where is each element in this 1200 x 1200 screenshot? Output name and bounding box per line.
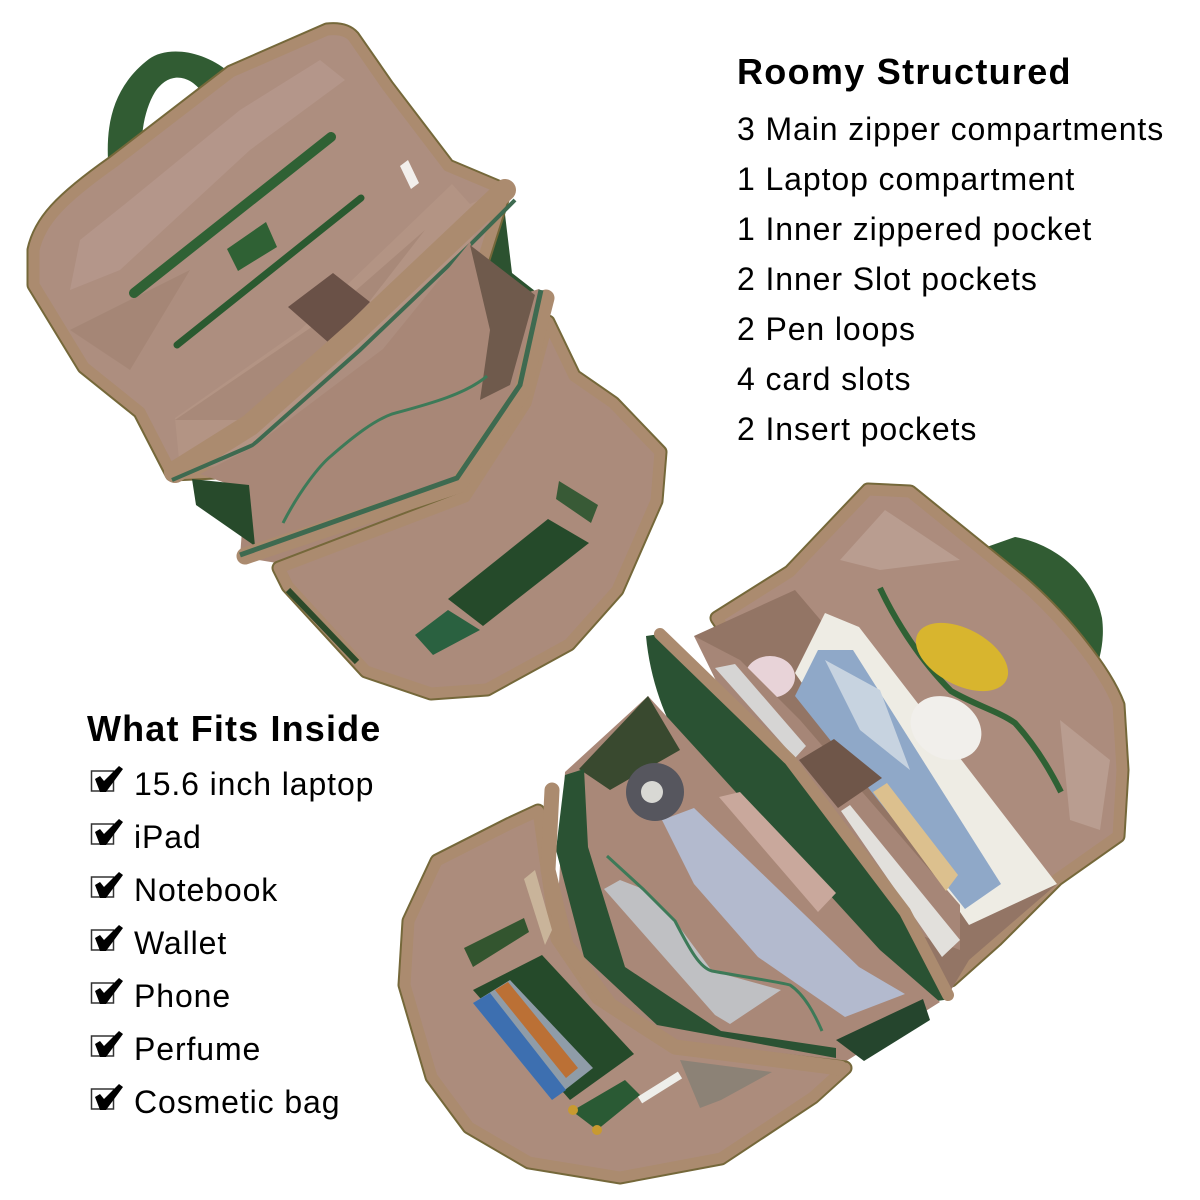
text block: compartments list: 2 Insert pockets [737,411,977,447]
green leather side [192,479,255,546]
text block: compartments list [737,111,1164,447]
back panel outline [717,490,1122,980]
ipad [604,880,781,1024]
green flap [646,634,951,1001]
striped cloth [662,808,905,1017]
care label [400,160,419,189]
zipper pocket [134,137,331,293]
checklist: what fits inside: Perfume [134,1031,261,1067]
flap band [660,634,948,995]
satin highlight [840,510,1110,830]
lower body base [556,696,940,1065]
lower green edge [288,590,357,662]
inner green flap band [556,769,836,1058]
fuzzy band [548,790,840,1068]
checklist: what fits inside: Notebook [134,872,278,908]
wallet [719,792,836,912]
compartment shadow [470,245,535,400]
bottom backpack: packed [405,490,1122,1177]
cable organizer [626,763,684,821]
satin highlights [70,60,345,290]
elastic strap [288,273,370,343]
checklist: what fits inside: Cosmetic bag [134,1084,340,1120]
divider pocket [694,636,960,950]
pocket stripe [880,588,1061,792]
leather tag [227,222,277,271]
peeking books [524,870,552,945]
sleeve pockets [175,184,500,470]
slot pocket [177,198,361,345]
small tag [556,481,598,523]
checklist: what fits inside: 15.6 inch laptop [134,766,374,802]
pen loops [572,1080,640,1130]
laptop band [175,190,505,472]
front compartment outline [279,322,660,693]
book cover [795,650,1001,909]
laptop lower [841,805,960,957]
green leather base [836,999,930,1061]
side leather [483,206,535,350]
text block: compartments list: 2 Inner Slot pockets [737,261,1038,297]
heading: what fits inside: What Fits Inside [87,708,381,749]
handle [981,537,1103,677]
small tag [464,918,529,967]
front compartment lining [279,322,660,693]
text block: compartments list: 3 Main zipper compartments [737,111,1164,147]
checklist: what fits inside [90,766,374,1120]
dark interior [579,696,680,790]
pink cosmetic [745,656,795,698]
notebook [873,783,958,891]
checklist: what fits inside: Wallet [134,925,227,961]
top backpack: empty, open [34,30,660,693]
heading: roomy structured: Roomy Structured [737,51,1072,92]
checklist: what fits inside: iPad [134,819,202,855]
laptop [715,664,806,758]
back panel outline [34,30,505,474]
pen [640,1075,680,1100]
text block: compartments list: 4 card slots [737,361,911,397]
cards [473,980,593,1100]
pen loops [415,610,480,655]
back panel lining [717,490,1122,980]
card holder [448,519,589,626]
middle compartment lining [200,242,552,564]
white cosmetic [899,684,993,772]
book pages [795,613,1057,925]
text block: compartments list: 1 Inner zippered pocket [737,211,1092,247]
handle [108,51,229,160]
front band [245,298,546,556]
checklist: what fits inside: Phone [134,978,231,1014]
perfume [905,609,1019,705]
back panel lining [34,30,505,474]
curved trim [283,376,487,523]
front compartment lining [405,811,845,1177]
elastic strap [799,739,882,808]
text block: compartments list: 1 Laptop compartment [737,161,1075,197]
text block: compartments list: 2 Pen loops [737,311,916,347]
compartment interior [694,590,1057,990]
green trim [607,856,822,1031]
front compartment outline [405,811,845,1177]
card holder [473,955,634,1100]
